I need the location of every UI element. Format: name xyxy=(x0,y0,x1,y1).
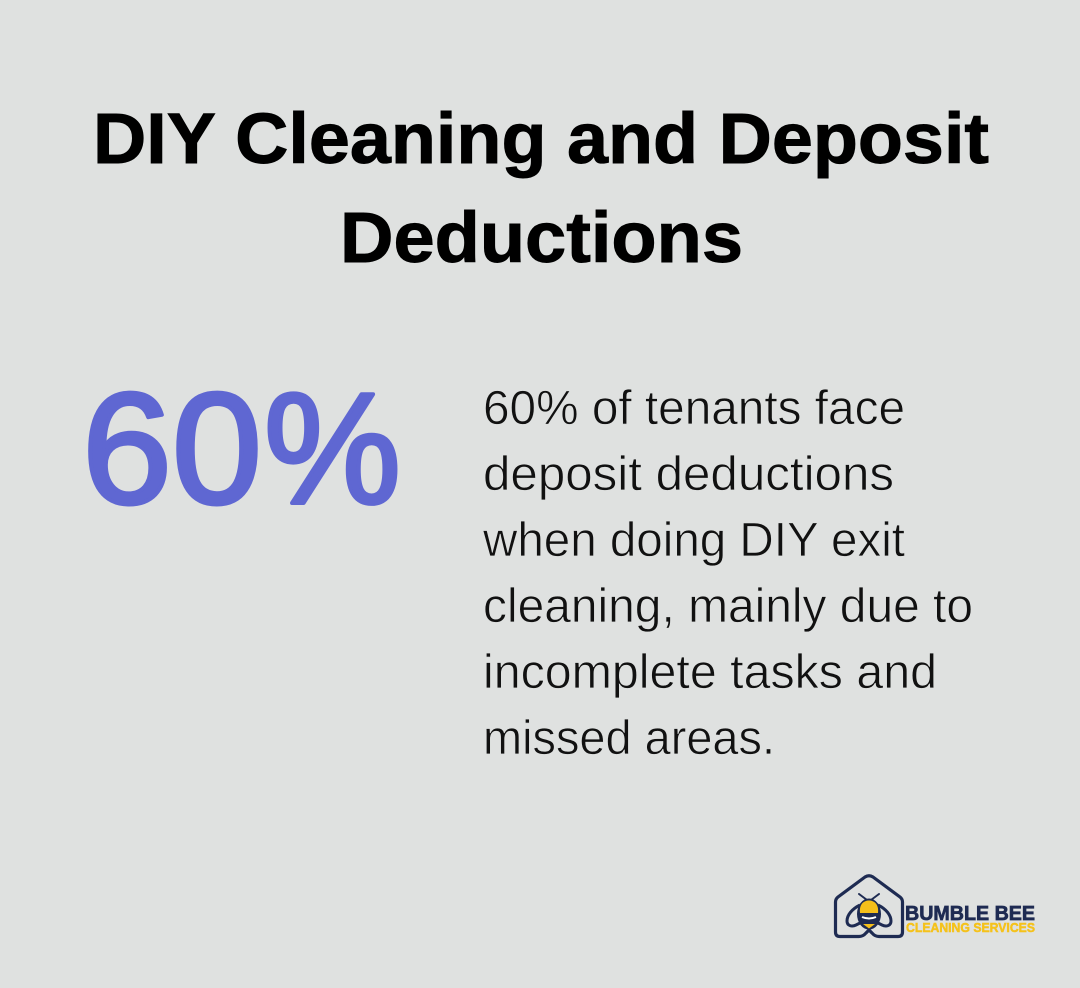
description text: missed areas. xyxy=(483,712,775,765)
description text: deposit deductions xyxy=(483,448,894,501)
icon: house with bee xyxy=(836,876,902,936)
title: Deductions xyxy=(340,199,743,278)
title xyxy=(93,100,989,278)
logo: Bumble Bee Cleaning Services xyxy=(836,876,1035,936)
logo tagline: CLEANING SERVICES xyxy=(906,920,1035,935)
big statistic: 60%: 60 xyxy=(82,361,262,537)
description text: incomplete tasks and xyxy=(483,646,937,699)
logo wordmark: BUMBLE BEE xyxy=(905,903,1035,925)
title: DIY Cleaning and Deposit xyxy=(93,100,989,179)
big statistic: 60% xyxy=(82,361,401,537)
description text: cleaning, mainly due to xyxy=(483,580,973,633)
description text xyxy=(482,382,973,765)
description text: when doing DIY exit xyxy=(482,514,905,567)
big statistic: 60%: % xyxy=(264,361,401,537)
description text: 60% of tenants face xyxy=(483,382,905,435)
